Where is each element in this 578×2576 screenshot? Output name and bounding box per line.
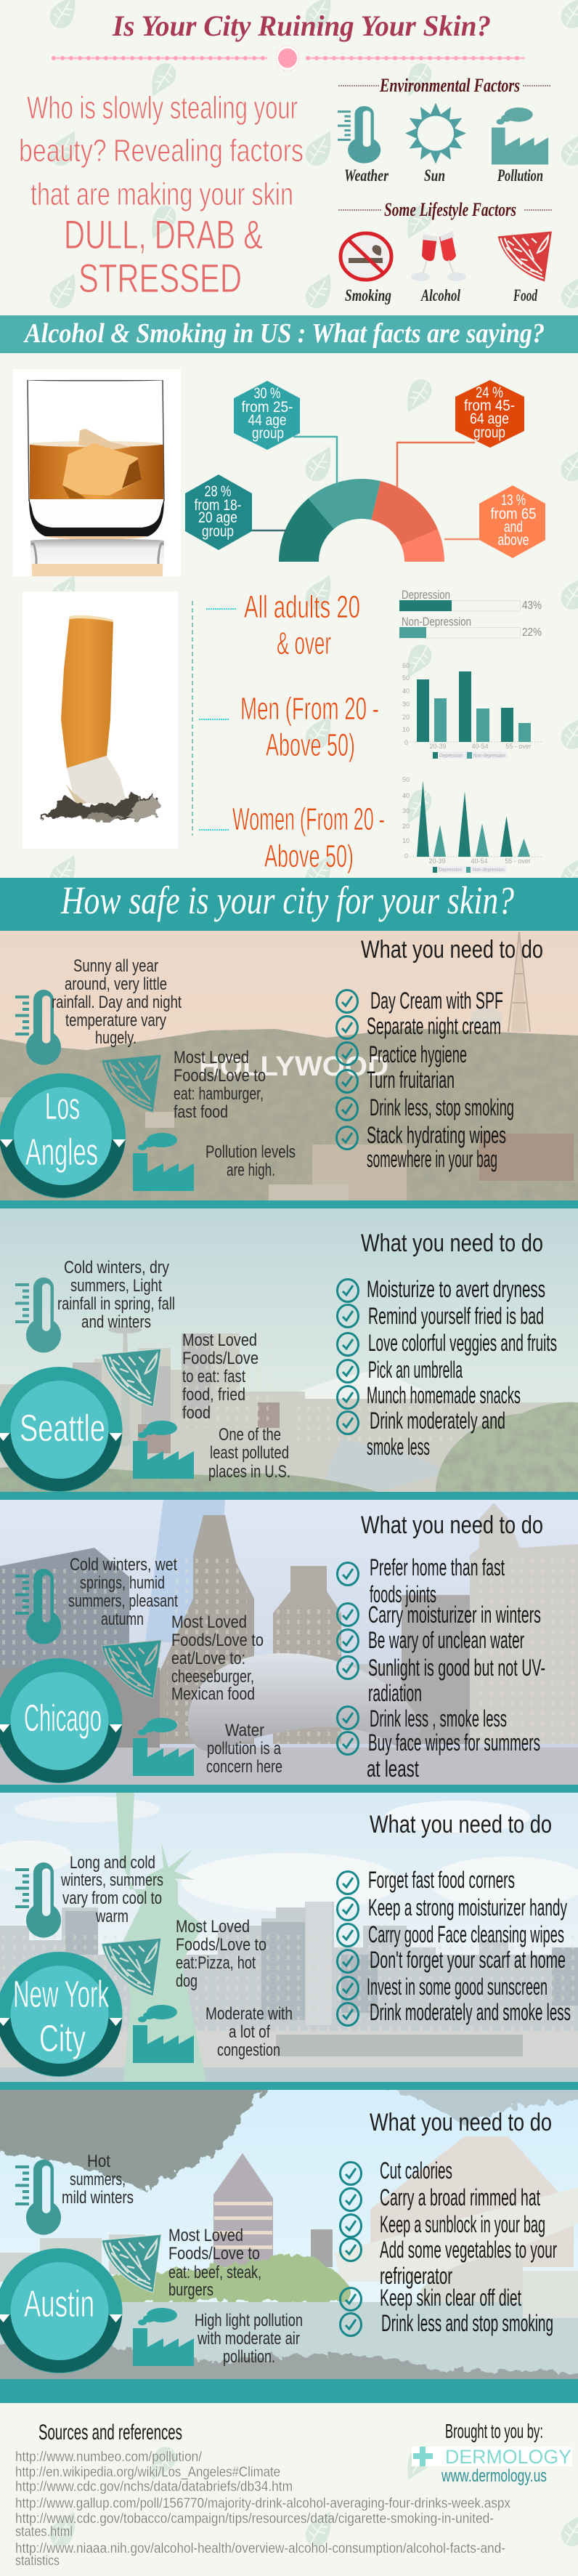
icon: thermometer: [15, 990, 61, 1065]
progress bars: 43%: [522, 599, 542, 612]
climate text: temperature vary: [65, 1011, 166, 1030]
bar chart: 55 - over: [505, 743, 532, 750]
photo: cigarette butt: [23, 591, 178, 849]
panel: Los Angeles: [0, 931, 578, 1200]
climate text: summers, Light: [70, 1276, 162, 1296]
hexagon: 13 percent: 13 %: [501, 492, 526, 509]
checklist: [337, 1867, 571, 2026]
panel: Seattle: [0, 1208, 578, 1492]
climate text: Cold winters, wet: [70, 1555, 177, 1575]
intro text: beauty? Revealing factors: [19, 133, 304, 169]
icon: factory: [133, 2005, 194, 2063]
photo: New York skyline and statue: [0, 1793, 578, 2082]
pollution text: [205, 2004, 293, 2060]
labels: environmental: Sun: [424, 166, 445, 185]
icon: food wedge: [102, 1938, 161, 1996]
pollution text: [205, 1142, 296, 1180]
icon: weather thermometer: [338, 106, 380, 163]
intro text: Who is slowly stealing your: [27, 90, 298, 126]
title: Is Your City Ruining Your Skin?: [112, 9, 491, 42]
triangle chart: 20: [402, 823, 410, 830]
food text: [168, 2226, 261, 2300]
label: men: Above 50): [266, 727, 355, 763]
hexagon: 13 percent: [479, 485, 545, 558]
sources and references: http://www.numbeo.com/pollution/: [15, 2450, 203, 2465]
icon: food wedge: [102, 1640, 161, 1698]
labels: lifestyle: Food: [513, 286, 537, 304]
sources and references: http://www.cdc.gov/tobacco/campaign/tips/resources/data/cigarette-smoking-in-united-: [15, 2511, 494, 2527]
city badge: Austin: [24, 2283, 94, 2325]
hexagon: 13 percent: from 65: [491, 506, 536, 522]
climate text: springs, humid: [80, 1573, 165, 1593]
timeline dashed lines: [192, 601, 236, 836]
pollution text: High light pollution: [195, 2311, 303, 2330]
panel: Chicago: [0, 1500, 578, 1785]
hexagon: 24 percent: from 45-: [464, 397, 515, 414]
progress bars: Non-Depression: [402, 615, 471, 629]
icon: thermometer: [15, 1277, 61, 1352]
icon: food wedge: [497, 231, 552, 282]
labels: lifestyle: [345, 286, 537, 304]
sources and references: Sources and references: [38, 2420, 182, 2444]
pollution text: a lot of: [229, 2022, 270, 2042]
triangle chart: [402, 776, 543, 873]
food text: Most Loved: [171, 1612, 247, 1632]
city badge: Chicago: [24, 1697, 102, 1740]
bar chart: 30: [402, 700, 410, 708]
climate text: around, very little: [65, 974, 167, 994]
checklist: at least: [367, 1756, 419, 1782]
city badge: City: [39, 2018, 86, 2060]
hexagon: 30 percent: group: [252, 425, 284, 442]
checklist: Turn fruitarian: [367, 1067, 455, 1093]
hexagon: 30 percent: 44 age: [248, 412, 286, 429]
food text: [174, 1048, 266, 1122]
labels: environmental: [344, 166, 543, 185]
sources and references: states.html: [15, 2524, 73, 2540]
icon: food wedge: [102, 2234, 161, 2293]
pollution text: with moderate air: [197, 2329, 300, 2349]
photo: Seattle skyline: [0, 1208, 578, 1492]
pollution text: [208, 1425, 290, 1482]
city badge: Angles: [25, 1131, 98, 1174]
icon: factory: [133, 2308, 194, 2366]
food text: eat:Pizza, hot: [176, 1953, 256, 1973]
icon: thermometer: [15, 2160, 61, 2234]
climate text: Sunny all year: [73, 956, 158, 976]
hexagon: 28 percent: group: [202, 523, 234, 540]
bar chart: Non-depression: [473, 754, 505, 759]
lifestyle factors heading: Some Lifestyle Factors: [384, 199, 516, 220]
progress bars: [399, 588, 542, 639]
icon: factory: [133, 1133, 194, 1191]
bar chart: Depression: [439, 754, 463, 759]
food text: food, fried: [182, 1385, 245, 1405]
progress bars: 22%: [522, 626, 542, 639]
icon: thermometer: [15, 1569, 61, 1644]
checklist: [337, 1554, 545, 1782]
ornament divider: [54, 46, 525, 70]
food text: Most Loved: [174, 1048, 249, 1067]
pollution text: pollution is a: [207, 1739, 281, 1759]
panel: New York City: [0, 1793, 578, 2082]
triangle chart: 10: [402, 837, 410, 844]
bar chart: 60: [402, 662, 410, 669]
icon: factory: [133, 1718, 194, 1776]
sources and references: [15, 2420, 510, 2569]
triangle chart: Depression: [439, 868, 462, 873]
bar chart: 40: [402, 687, 410, 695]
checklist: Pick an umbrella: [368, 1357, 463, 1383]
pollution text: places in U.S.: [208, 1462, 290, 1482]
icon: thermometer: [15, 1862, 61, 1937]
checklist: radiation: [368, 1680, 422, 1706]
intro text: DULL, DRAB &: [64, 211, 263, 257]
food text: cheeseburger,: [171, 1667, 254, 1687]
climate text: Long and cold: [70, 1853, 155, 1873]
food text: Foods/Love to: [168, 2244, 260, 2264]
food text: Foods/Love to: [171, 1631, 264, 1650]
climate text: mild winters: [62, 2188, 134, 2208]
pollution text: [206, 1721, 282, 1777]
progress bars: Depression: [402, 588, 450, 602]
icon: food wedge: [102, 1054, 161, 1113]
labels: environmental: Pollution: [497, 166, 543, 185]
brought to you by logo: [412, 2420, 572, 2486]
triangle chart: Non-depression: [473, 868, 505, 873]
climate text: rainfall. Day and night: [52, 993, 182, 1012]
photo: Chicago skyline and bean: [0, 1500, 578, 1785]
sources and references: http://www.gallup.com/poll/156770/majority-drink-alcohol-averaging-four-drinks-week.aspx: [15, 2496, 510, 2511]
food text: [176, 1917, 266, 1991]
intro text: that are making your skin: [30, 177, 293, 212]
photo: Austin skyline and river: [0, 2083, 578, 2386]
food text: Foods/Love to: [176, 1935, 266, 1955]
hexagon: 28 percent: 28 %: [205, 483, 231, 500]
photo: Hollywood hills: [0, 931, 578, 1200]
city badge: [0, 1073, 126, 1198]
city badge: [0, 1952, 122, 2077]
hexagon: 13 percent: and: [504, 519, 523, 536]
icon: food wedge: [102, 1349, 161, 1407]
bar chart: 0: [404, 739, 408, 746]
checklist: foods joints: [370, 1581, 436, 1607]
triangle chart: 30: [402, 807, 410, 815]
icon: sun: [405, 103, 466, 164]
pollution text: Moderate with: [205, 2004, 293, 2024]
triangle chart: 0: [404, 852, 408, 860]
climate text: [68, 1555, 178, 1629]
hexagon: 24 percent: 64 age: [470, 411, 509, 427]
climate text: Cold winters, dry: [64, 1258, 169, 1277]
chart: age group arc: [279, 479, 444, 562]
labels: lifestyle: Alcohol: [420, 286, 460, 304]
pollution text: One of the: [219, 1425, 281, 1445]
sources and references: http://en.wikipedia.org/wiki/Los_Angeles#Climate: [15, 2465, 280, 2480]
bar chart: 20: [402, 714, 410, 721]
label: all adults: & over: [277, 626, 331, 661]
label: women: Above 50): [264, 839, 354, 874]
icon: no smoking: [341, 233, 391, 280]
city badge: [0, 2248, 122, 2373]
climate text: warm: [95, 1907, 129, 1926]
photo: whisky glass: [13, 369, 181, 576]
sources and references: http://www.niaaa.nih.gov/alcohol-health/overview-alcohol-consumption/alcohol-facts-and-: [15, 2541, 505, 2556]
checklist: [337, 988, 514, 1172]
food text: eat: hamburger,: [174, 1084, 264, 1104]
hexagon: 28 percent: from 18-: [195, 497, 242, 514]
pollution text: congestion: [217, 2040, 280, 2060]
food text: [171, 1612, 264, 1704]
label: all adults: All adults 20: [244, 589, 360, 625]
food text: Most Loved: [176, 1917, 250, 1937]
hexagon: 24 percent: group: [473, 424, 505, 441]
checklist: [340, 2157, 557, 2336]
climate text: rainfall in spring, fall: [57, 1294, 175, 1314]
hexagon: 24 percent: [455, 380, 524, 448]
food text: burgers: [168, 2280, 213, 2300]
sources and references: statistics: [15, 2553, 60, 2569]
climate text: winters, summers: [60, 1870, 163, 1890]
food text: Most Loved: [168, 2226, 243, 2245]
bar chart: [402, 662, 543, 759]
label: women: Women (From 20 -: [232, 802, 385, 837]
checklist: [337, 1276, 557, 1460]
food text: [182, 1331, 259, 1423]
city badge: Seattle: [20, 1408, 105, 1450]
environmental factors heading: Environmental Factors: [379, 75, 520, 96]
triangle chart: 55 - over: [505, 857, 531, 865]
food text: fast food: [174, 1102, 228, 1122]
food text: Foods/Love to: [174, 1066, 266, 1086]
labels: lifestyle: Smoking: [345, 286, 391, 304]
pollution text: are high.: [227, 1160, 275, 1180]
pollution text: Water: [225, 1721, 264, 1740]
label: men: [240, 691, 379, 763]
hexagon: 13 percent: above: [498, 532, 529, 549]
food text: dog: [176, 1971, 198, 1991]
checklist: smoke less: [367, 1434, 430, 1460]
climate text: vary from cool to: [62, 1889, 162, 1908]
food text: Most Loved: [182, 1331, 257, 1350]
bar chart: 20-39: [429, 743, 447, 750]
pollution text: least polluted: [210, 1443, 289, 1463]
label: women: [232, 802, 385, 874]
pollution text: pollution.: [223, 2347, 275, 2367]
hexagon: 28 percent: 20 age: [198, 509, 237, 526]
triangle chart: 50: [402, 776, 410, 783]
food text: to eat: fast: [182, 1367, 245, 1386]
label: all adults: [244, 589, 360, 661]
food text: food: [182, 1403, 211, 1423]
triangle chart: 20-39: [428, 857, 446, 865]
hexagon: 30 percent: 30 %: [254, 385, 280, 402]
intro text: STRESSED: [78, 255, 242, 301]
triangle chart: 40-54: [471, 857, 488, 865]
city badge: [0, 1367, 122, 1492]
panel: Austin: [0, 2083, 578, 2386]
connector lines: [252, 437, 479, 539]
pollution text: concern here: [206, 1757, 282, 1777]
checklist: Practice hygiene: [369, 1041, 467, 1067]
checklist: refrigerator: [380, 2263, 452, 2289]
climate text: [62, 2152, 134, 2208]
climate text: Hot: [87, 2152, 110, 2171]
sources and references: http://www.cdc.gov/nchs/data/databriefs/db34.htm: [15, 2479, 293, 2495]
city badge: [0, 1658, 122, 1783]
bar chart: 10: [402, 726, 410, 733]
photo: Hollywood hills: HOLLYWOOD: [199, 1051, 388, 1082]
food text: Mexican food: [171, 1684, 255, 1704]
intro text: [19, 90, 304, 301]
checklist: Cut calories: [380, 2157, 452, 2184]
triangle chart: 40: [402, 792, 410, 799]
city badge: Los: [45, 1086, 80, 1128]
hexagon: 24 percent: 24 %: [476, 384, 503, 401]
food text: eat/Love to:: [171, 1649, 245, 1668]
icon: factory: [133, 1421, 194, 1479]
brought to you by logo: DERMOLOGY: [445, 2446, 571, 2468]
pollution text: Pollution levels: [205, 1142, 296, 1162]
hexagon: 28 percent: [185, 475, 252, 550]
climate text: and winters: [81, 1312, 151, 1332]
pollution text: [195, 2311, 303, 2367]
climate text: summers, pleasant: [68, 1591, 178, 1611]
climate text: [57, 1258, 175, 1332]
labels: environmental: Weather: [344, 166, 389, 185]
hexagon: 30 percent: from 25-: [241, 399, 293, 416]
bar chart: 40-54: [471, 743, 489, 750]
icon: alcohol glasses: [411, 231, 466, 281]
bar chart: 50: [402, 674, 410, 682]
hexagon: 30 percent: [234, 381, 300, 450]
icon: pollution factory: [492, 108, 548, 164]
climate text: [52, 956, 182, 1048]
label: men: Men (From 20 -: [240, 691, 379, 727]
climate text: autumn: [101, 1610, 144, 1629]
city badge: New York: [13, 1974, 110, 2016]
climate text: [60, 1853, 163, 1926]
food text: eat: beef, steak,: [168, 2263, 261, 2282]
climate text: summers,: [70, 2170, 126, 2189]
climate text: hugely.: [95, 1028, 137, 1048]
food text: Foods/Love: [182, 1349, 259, 1368]
